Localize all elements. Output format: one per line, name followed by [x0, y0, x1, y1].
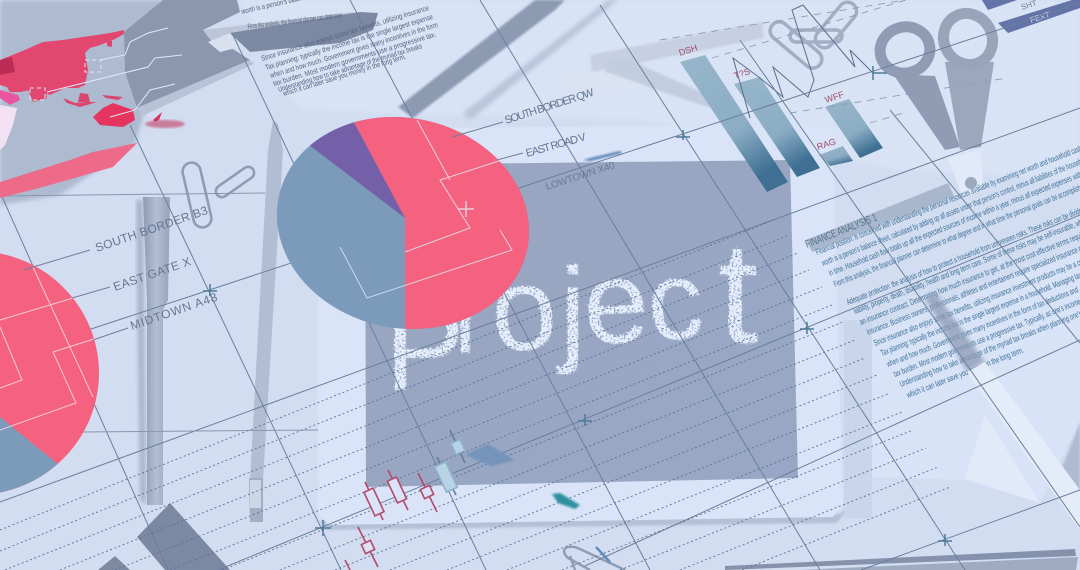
top document text: Understanding how to take advantage of the myriad tax breaks [277, 41, 423, 94]
icon: paper clips, top [766, 0, 860, 72]
top-right legend bars: FEXT [1029, 10, 1051, 25]
right document heading [804, 183, 954, 252]
right document text [814, 143, 1080, 400]
handwritten word on the screen: t [718, 211, 759, 374]
right document heading: FINANCE ANALYSIS 1 [804, 212, 879, 251]
left pie chart [0, 254, 99, 492]
bar chart: DSH [678, 43, 699, 58]
handwritten word on the screen [385, 211, 759, 416]
white tubes near the bars [565, 22, 764, 108]
label: Midtown A48 [93, 290, 219, 340]
top document text [240, 0, 439, 98]
top document text: which it can later save you money in the long term. [281, 52, 407, 98]
handwritten word on the screen: j [557, 244, 586, 376]
large pie chart [276, 117, 530, 329]
top document text: when and how much. Government gives many incentives in the form [268, 20, 439, 80]
top-left dark pen and case [124, 0, 378, 116]
pencil [249, 120, 283, 522]
label: South Border B3 [23, 203, 210, 270]
label: South Border QW [452, 87, 596, 137]
bottom-left eraser [98, 503, 230, 570]
label: South Border B3: SOUTH BORDER B3 [93, 203, 210, 255]
bar chart [678, 43, 883, 192]
icon: scissors [875, 4, 1002, 196]
icon: paper clips, bottom [564, 547, 625, 570]
top document text: tax burden. Most modern governments use a progressive tax. [272, 30, 437, 88]
top-right paper sheet [240, 0, 1080, 180]
world map [0, 30, 185, 198]
right paper sheet [844, 250, 1080, 518]
teal smudge on the tablet frame [552, 493, 580, 509]
tablet frame [318, 124, 848, 530]
top document text: Tax planning: typically the income tax is the single largest expense [264, 12, 434, 72]
bar chart: RAG [816, 136, 837, 152]
grid crosshair markers [203, 66, 952, 546]
bar chart: T?S [733, 66, 751, 81]
handwritten word on the screen: P [385, 282, 465, 416]
handwritten word on the screen: o [487, 242, 561, 378]
bottom-right dark pen [725, 549, 1078, 570]
label: Midtown A48: MIDTOWN A48 [128, 290, 219, 333]
label: East Gate X [72, 254, 193, 298]
handwritten word on the screen: c [643, 236, 708, 365]
zigzag line chart [733, 5, 873, 118]
blue smudge above the screen [583, 151, 622, 161]
label: East Road V: EAST ROAD V [525, 131, 588, 160]
label: East Road V [497, 131, 588, 160]
icon: paper clip, left [181, 161, 256, 229]
handwritten word on the screen: e [579, 235, 653, 371]
top document text: From this analysis, the financial planner can determine [247, 10, 343, 31]
label: Lowtown X40: LOWTOWN X40 [545, 160, 617, 193]
label: East Gate X: EAST GATE X [111, 254, 193, 294]
top-right legend bars [982, 0, 1080, 33]
label: South Border QW: SOUTH BORDER QW [503, 87, 596, 127]
left pen [136, 197, 170, 505]
top pens [398, 0, 618, 120]
candlestick chart [345, 430, 465, 570]
top-left grey notebook area [0, 0, 170, 205]
white pen on the right [925, 292, 1080, 530]
left pie overlay lines [0, 267, 97, 430]
bar chart: WFF [824, 89, 846, 105]
handwritten word on the screen: r [454, 263, 487, 375]
map connector lines [30, 28, 182, 117]
blurred blue smudge on the screen [465, 444, 515, 466]
tablet screen [365, 160, 798, 487]
pie overlay lines [340, 120, 512, 298]
